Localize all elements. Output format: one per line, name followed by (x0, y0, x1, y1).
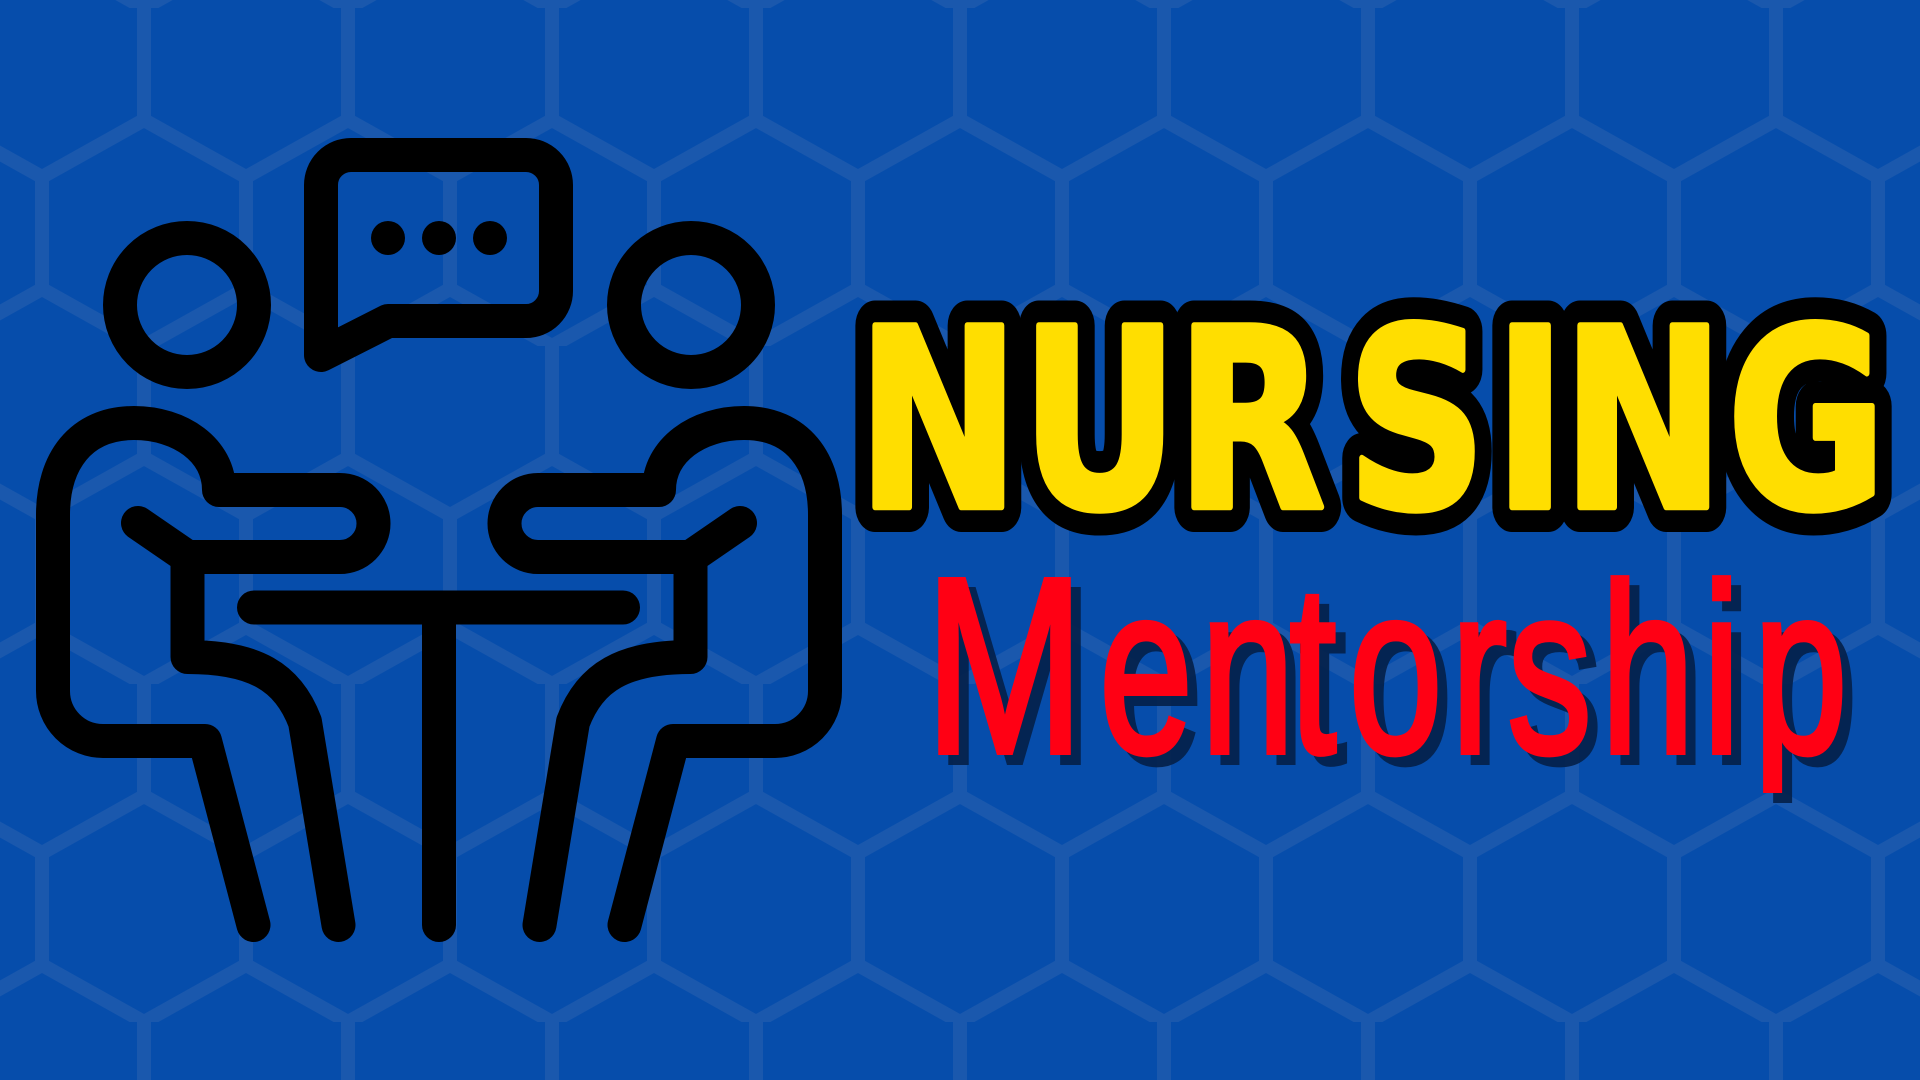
icon: right person head (624, 238, 758, 372)
title: NURSING: NURSING (857, 276, 1886, 566)
icon: two people talking at a table (53, 155, 825, 925)
icon: left person body (53, 423, 374, 925)
subtitle: Mentorship: M (925, 527, 1084, 806)
icon: table (254, 608, 623, 925)
icon: right person body (504, 423, 825, 925)
subtitle: Mentorship: entorship (1099, 534, 1847, 803)
icon: left person head (120, 238, 254, 372)
title: NURSING: NURSING (857, 276, 1886, 566)
icon: speech bubble (321, 155, 556, 355)
